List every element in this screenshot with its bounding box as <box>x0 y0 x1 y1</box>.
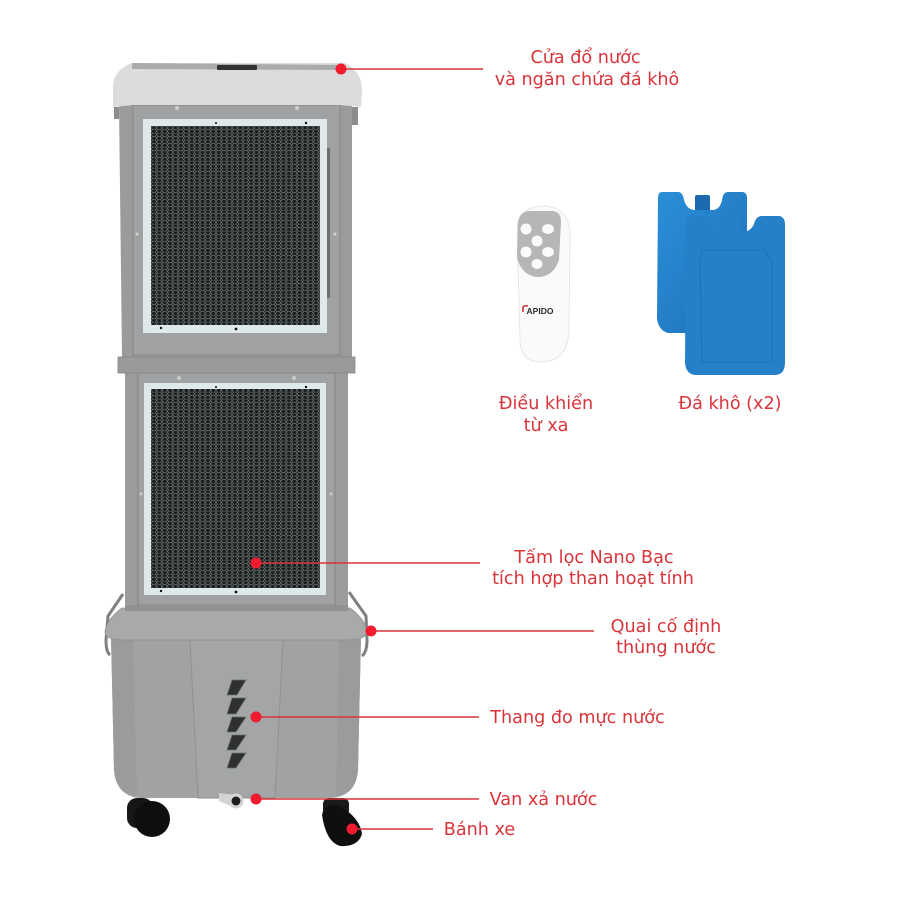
remote control <box>517 206 570 362</box>
label: wheels: Bánh xe <box>444 820 515 840</box>
label: remote <box>499 393 593 436</box>
callout: valve marker <box>250 794 479 804</box>
water tank <box>105 608 367 798</box>
label: filter: Tấm lọc Nano Bạc <box>513 547 674 568</box>
label: water door <box>495 47 679 90</box>
wheel: rear left <box>127 798 170 837</box>
label: filter <box>492 547 694 589</box>
remote logo: APIDO <box>527 306 554 316</box>
label: water door: và ngăn chứa đá khô <box>495 70 679 90</box>
label: remote: Điều khiển <box>499 393 593 414</box>
remote button panel <box>517 211 561 277</box>
top cap <box>113 63 362 107</box>
callout lines and markers <box>250 64 594 834</box>
drain valve <box>219 793 244 808</box>
lower filter <box>144 383 326 595</box>
label: dry ice: Đá khô (x2) <box>678 394 782 414</box>
callout: water door marker <box>336 64 483 74</box>
upper filter <box>143 119 327 333</box>
label: handle <box>611 616 721 658</box>
label: level gauge: Thang đo mực nước <box>489 708 665 728</box>
front ice pack <box>685 216 785 375</box>
back ice pack <box>657 192 747 333</box>
callout: filter marker <box>250 558 480 568</box>
air cooler product <box>105 63 367 846</box>
label: water door: Cửa đổ nước <box>530 47 641 68</box>
water level gauge <box>227 680 246 768</box>
wheel: rear right <box>322 798 362 846</box>
callout: handle marker <box>366 626 594 636</box>
label: remote: từ xa <box>524 416 568 436</box>
tank lid <box>105 608 367 640</box>
side handles <box>106 592 367 656</box>
collar <box>118 357 355 373</box>
callout: wheel marker <box>346 824 433 834</box>
ice packs <box>657 192 785 375</box>
callout: gauge marker <box>250 712 479 722</box>
label: handle: thùng nước <box>616 638 716 658</box>
label: drain valve: Van xả nước <box>490 790 597 810</box>
lower body <box>125 373 348 611</box>
label: handle: Quai cố định <box>611 616 721 637</box>
label: filter: tích hợp than hoạt tính <box>492 569 694 589</box>
upper body <box>114 105 358 357</box>
